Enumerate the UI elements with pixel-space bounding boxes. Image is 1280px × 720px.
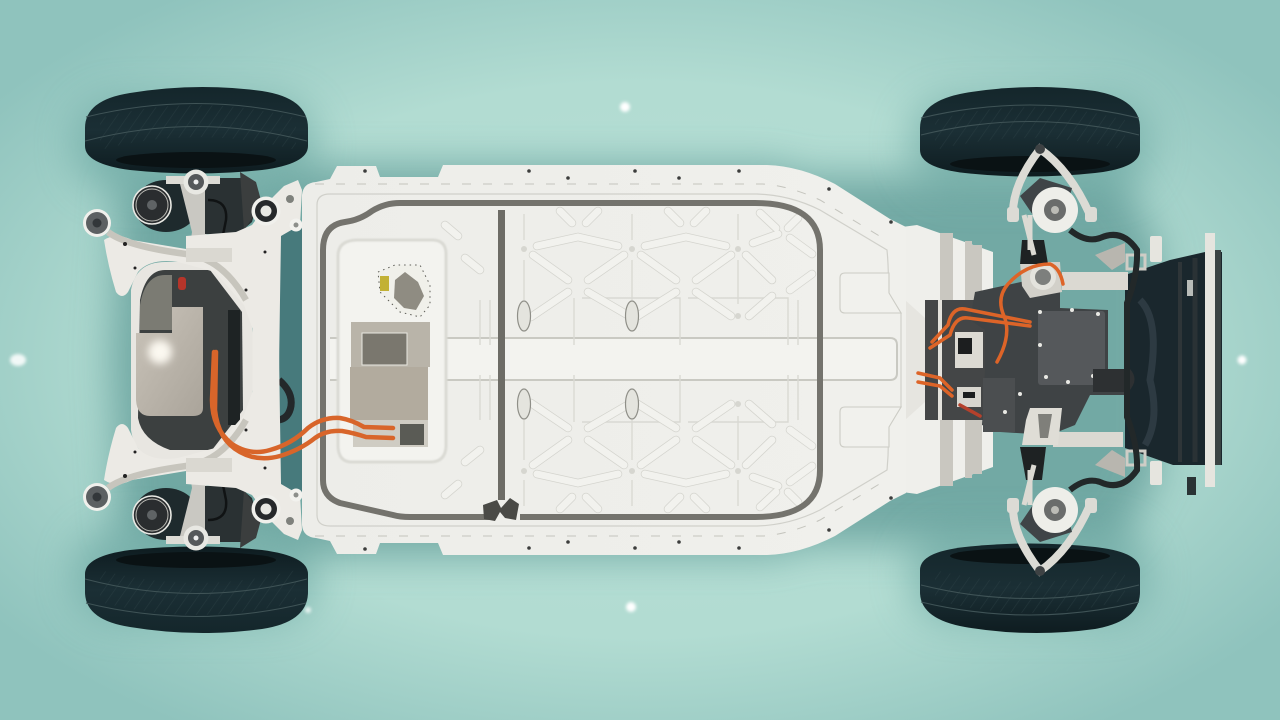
- upper drive shaft housing: [1020, 240, 1062, 298]
- port hexagon: [394, 272, 424, 310]
- front upper wishbone and hub: [1007, 144, 1137, 360]
- bracket: [1150, 461, 1162, 485]
- cross member mounts: [518, 301, 638, 419]
- side rectangles: [840, 273, 901, 447]
- rim dashed fasteners: [315, 184, 886, 536]
- vertical channel: [498, 210, 505, 500]
- rear dark grey block: [140, 275, 172, 330]
- bracket: [1150, 236, 1162, 262]
- front lower wishbone and hub: [1007, 360, 1137, 576]
- tyre: rear top: [85, 87, 308, 174]
- rear suspension top: [83, 170, 302, 440]
- tyre: rear bottom: [85, 546, 308, 633]
- rim ridge line: [317, 194, 901, 526]
- rear suspension bottom: [83, 280, 302, 550]
- yellow connector: [380, 276, 389, 291]
- battery pack plate: [302, 165, 906, 555]
- connector dark: [400, 424, 424, 445]
- rim bolts: [363, 169, 893, 551]
- wheel shadow halos: [75, 100, 1150, 620]
- orange HV cables rear: [212, 352, 393, 458]
- cavity and inner dark housing: [131, 262, 255, 462]
- front silver cross beams: [1053, 243, 1145, 477]
- raised area around the electronics: [338, 240, 446, 462]
- lower power unit: [350, 367, 428, 421]
- stamped thin lines: [480, 214, 798, 506]
- dark strip: [228, 310, 240, 425]
- on-board charger module: [350, 322, 430, 447]
- centre tunnel: [330, 338, 897, 380]
- tyre: front bottom: [920, 544, 1140, 633]
- stamped slots: [445, 211, 812, 509]
- channel junction: [483, 498, 519, 521]
- tyre: front top: [920, 87, 1140, 176]
- charge port plate: [378, 265, 430, 317]
- rear black hose: [279, 380, 291, 420]
- connector block: [353, 420, 428, 447]
- dark gap between rear frame and battery: [279, 222, 304, 498]
- red connector: [178, 277, 186, 290]
- orange HV cables front: [918, 264, 1063, 416]
- metal bracket: [240, 395, 272, 452]
- soft shadow under the chassis: [110, 165, 1160, 556]
- plug: [1187, 477, 1196, 495]
- lower differential: [1020, 408, 1062, 480]
- box highlight: [148, 340, 172, 364]
- plate outline: [302, 165, 906, 555]
- front structure stripes: [902, 225, 1000, 494]
- front motor and inverter: [970, 240, 1135, 480]
- radiator module: [1125, 233, 1222, 495]
- main grey motor box: [136, 307, 203, 416]
- charger inner panel: [362, 333, 407, 365]
- small stamped circles: [521, 246, 741, 474]
- light sparkles: [10, 102, 1246, 613]
- grey coolant channel: [323, 203, 820, 517]
- rear drive unit: [131, 262, 272, 462]
